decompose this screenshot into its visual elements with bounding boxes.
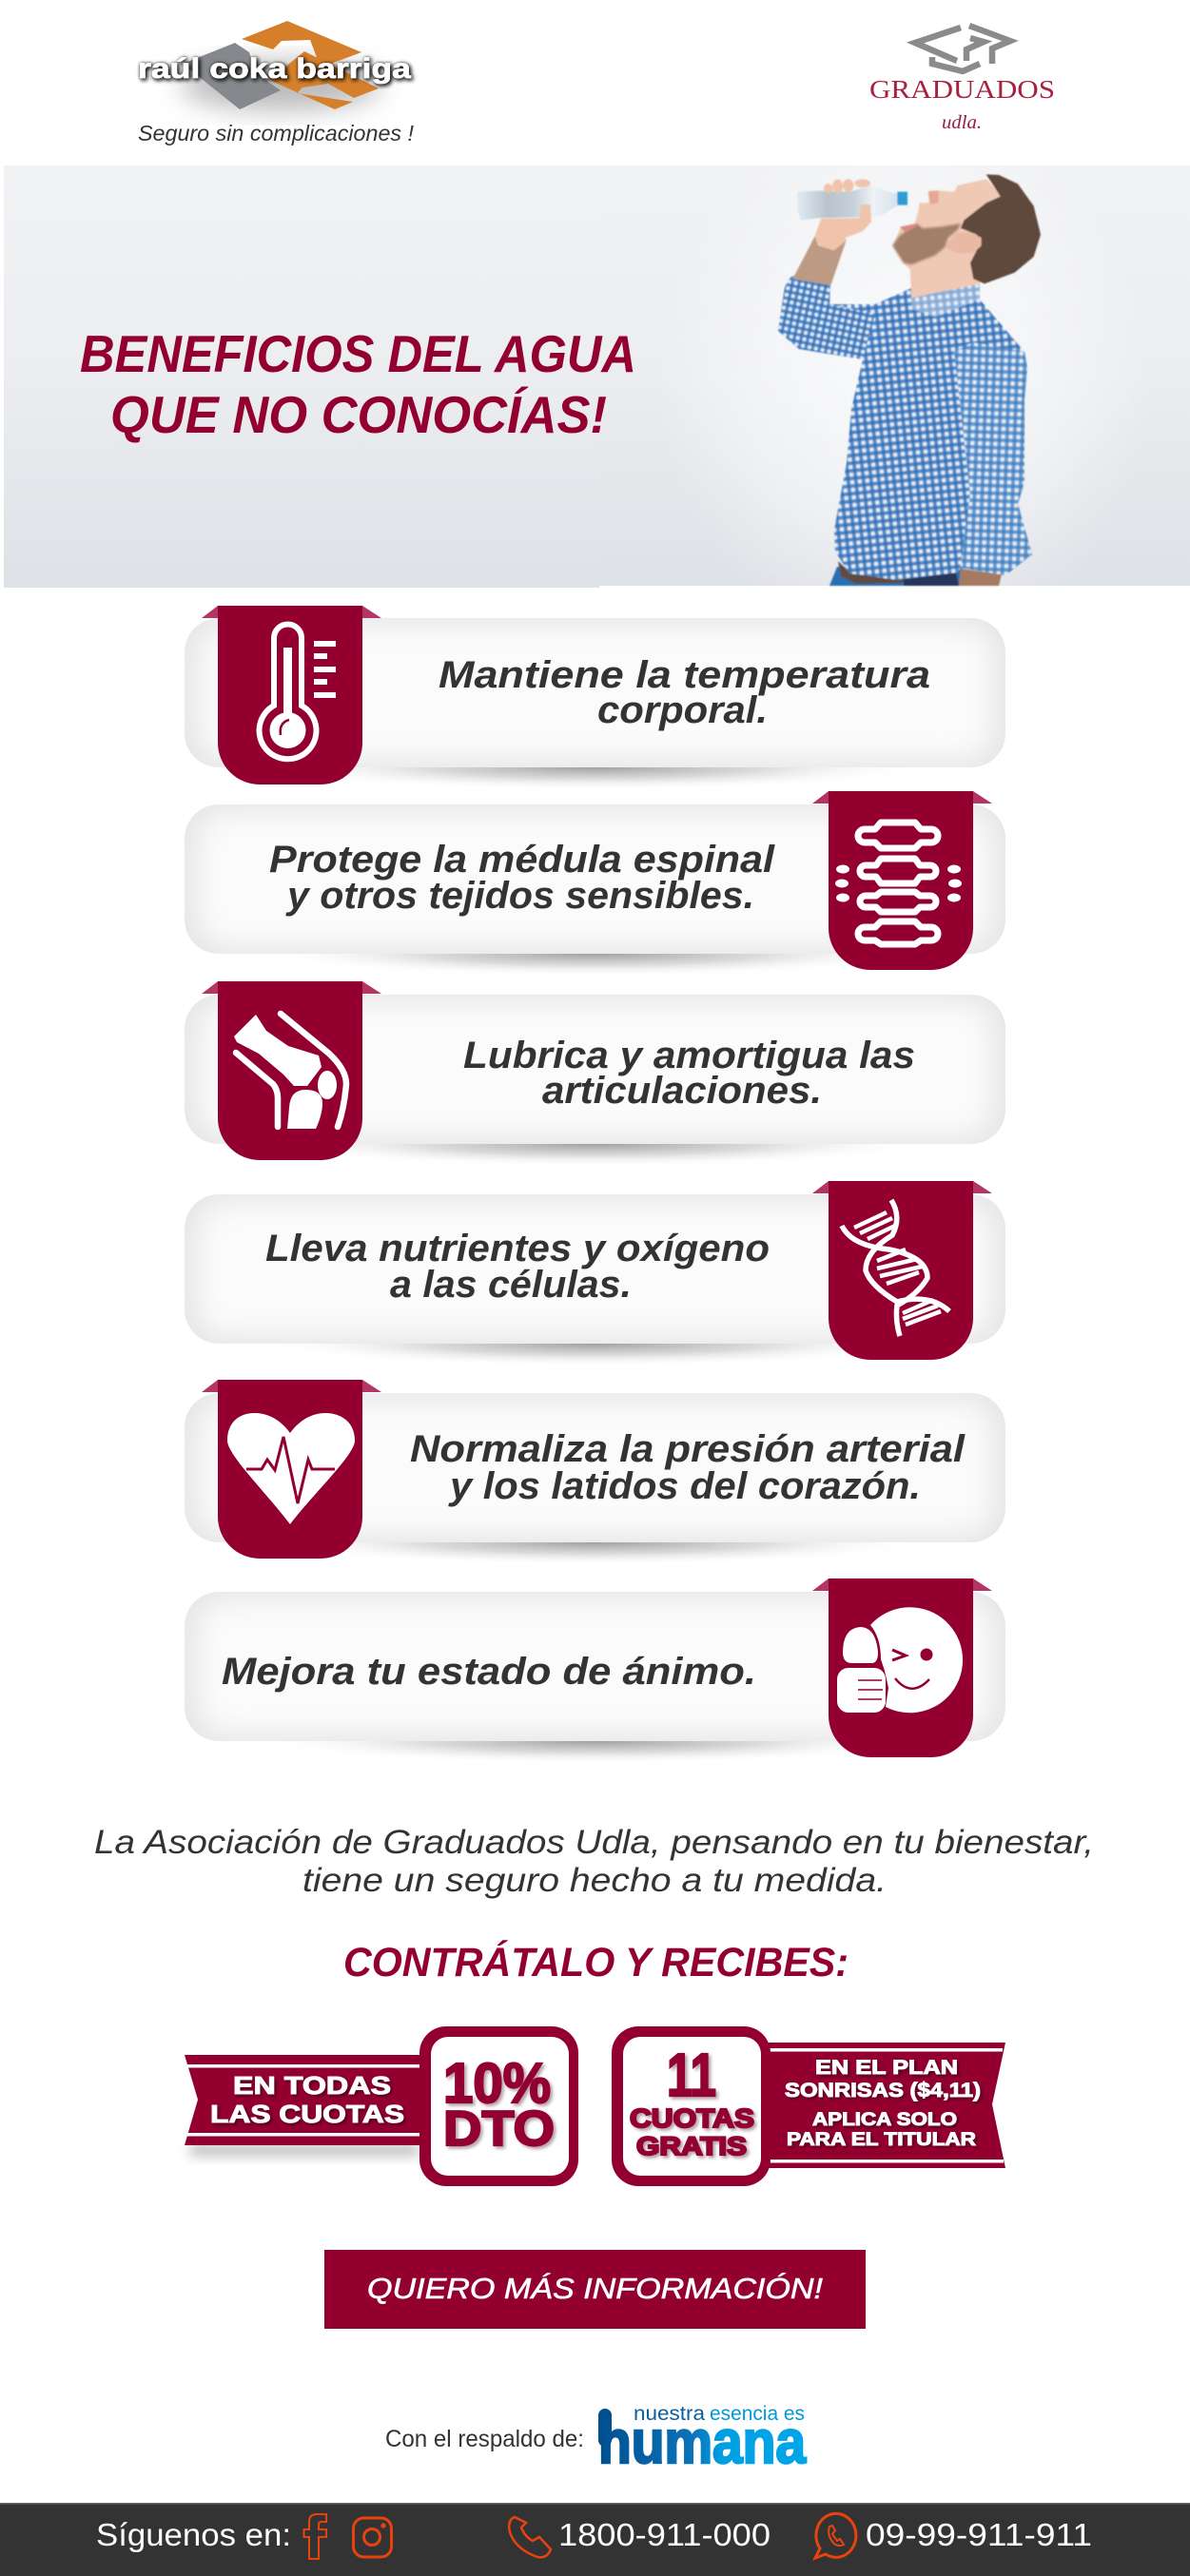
ribbon text: EN EL PLAN: [815, 2057, 958, 2079]
text: udla signature: udla.: [942, 112, 982, 133]
beard: [892, 223, 961, 264]
icon: phone: [509, 2517, 551, 2557]
icon: gray diamond: [183, 43, 281, 109]
hero title: BENEFICIOS DEL AGUA: [80, 324, 636, 383]
paragraph: insurance message: tiene un seguro hecho a tu medida.: [302, 1862, 887, 1899]
hero title: [80, 324, 636, 444]
icon: winking face with thumb up: [837, 1607, 963, 1713]
jeans and belt: [829, 561, 1002, 586]
benefit card 4: nutrients: [185, 1181, 1005, 1366]
installments badge: [612, 2026, 771, 2186]
logo: Humana: [598, 2403, 806, 2476]
ribbon text: LAS CUOTAS: [210, 2100, 404, 2128]
offer: 11 free installments: [612, 2026, 1005, 2186]
header: Raúl Coka Barriga logo: [138, 21, 415, 145]
icon: graduation cap: [915, 26, 1010, 71]
tagline: esencia es: [710, 2403, 805, 2425]
head, arm and bottle drawn in photo crop coordinates: [792, 174, 1041, 317]
ribbon: [202, 981, 381, 1160]
shirt: [778, 276, 1032, 580]
ribbon text: EN TODAS: [233, 2071, 391, 2100]
benefit card 1: temperature: [185, 606, 1005, 790]
text: y los latidos del corazón.: [448, 1465, 921, 1507]
icon: spine: [858, 823, 938, 944]
text: [265, 1228, 770, 1306]
text: Protege la médula espinal: [269, 839, 775, 881]
benefit card 3: joints: [185, 981, 1005, 1167]
text: [410, 1428, 966, 1507]
collar: [911, 283, 980, 317]
card background: [185, 1592, 1005, 1764]
icon: thermometer: [259, 624, 336, 759]
installments badge: GRATIS: [636, 2132, 747, 2160]
shirt raised arm: [778, 276, 875, 359]
icon: orange diamond: [242, 21, 379, 109]
heading: contrátalo y recibes: CONTRÁTALO Y RECIBES:: [343, 1940, 849, 1985]
ear: [945, 232, 982, 254]
text: company name: raúl coka barriga: [138, 53, 411, 85]
neck and face: [892, 179, 1004, 298]
hair: [961, 174, 1041, 283]
header: Graduados UDLA logo: [869, 26, 1055, 133]
card background: [185, 804, 1005, 977]
icon: knee: [234, 1014, 346, 1129]
text: [463, 1035, 915, 1112]
right ribbon: [767, 2043, 1005, 2168]
discount badge: [419, 2026, 578, 2186]
text: Lubrica y amortigua las: [463, 1035, 915, 1076]
wordmark: humana: [598, 2408, 806, 2476]
left ribbon: [185, 2055, 423, 2145]
ribbon: [202, 1380, 381, 1559]
text: [269, 839, 775, 917]
text: Normaliza la presión arterial: [410, 1428, 966, 1470]
hand: [815, 179, 871, 250]
benefit card 6: mood: [185, 1579, 1005, 1764]
paragraph: insurance message: La Asociación de Graduados Udla, pensando en tu bienestar,: [94, 1824, 1094, 1861]
installments badge: 11: [667, 2041, 716, 2109]
footer bar: [0, 2503, 1190, 2576]
ribbon shadow: [190, 2143, 419, 2157]
text: y otros tejidos sensibles.: [285, 875, 754, 917]
card background: [185, 1393, 1005, 1565]
shirt sleeve: [954, 342, 1032, 575]
forearm: [792, 236, 847, 285]
hero banner: [4, 105, 1190, 656]
text: articulaciones.: [542, 1070, 822, 1112]
backing line: Con el respaldo de:: [385, 2426, 584, 2452]
text: Mejora tu estado de ánimo.: [222, 1651, 756, 1693]
discount badge: 10%: [443, 2052, 551, 2115]
text: Mantiene la temperatura: [439, 654, 930, 696]
icon: facebook: [304, 2514, 326, 2559]
icon: heart with pulse: [227, 1413, 355, 1524]
card background: [185, 995, 1005, 1167]
photo: man drinking water: [778, 174, 1041, 586]
tagline: nuestra: [634, 2403, 705, 2425]
ribbon: [812, 1181, 992, 1360]
card background: [185, 1194, 1005, 1366]
tagline: [634, 2403, 805, 2425]
ribbon: [812, 1579, 992, 1757]
button: more information: [324, 2250, 866, 2329]
hero title: QUE NO CONOCÍAS!: [110, 385, 607, 444]
ribbon text: SONRISAS ($4,11): [785, 2080, 981, 2101]
text: whatsapp number: 09-99-911-911: [866, 2517, 1092, 2552]
ribbon text: PARA EL TITULAR: [787, 2130, 976, 2150]
installments badge: CUOTAS: [630, 2103, 754, 2133]
button: more information: QUIERO MÁS INFORMACIÓN!: [367, 2272, 823, 2305]
lips and nose shading: [900, 191, 939, 232]
paragraph: insurance message: [94, 1824, 1094, 1899]
icon: whatsapp: [815, 2513, 856, 2558]
ribbon text: APLICA SOLO: [812, 2110, 957, 2130]
benefit card 5: blood pressure: [185, 1380, 1005, 1565]
icon: spine side marks: [835, 865, 962, 901]
text: GRADUADOS: GRADUADOS: [869, 75, 1055, 104]
text: a las células.: [390, 1264, 632, 1306]
icon: DNA: [842, 1200, 949, 1336]
benefit card 2: spinal cord: [185, 791, 1005, 977]
text: tagline: Seguro sin complicaciones !: [138, 121, 415, 145]
icon: instagram: [354, 2518, 392, 2557]
ribbon text: [785, 2057, 981, 2150]
ribbon: [202, 606, 381, 784]
ribbon text: [210, 2071, 404, 2128]
text: corporal.: [597, 689, 768, 731]
text: [439, 654, 930, 731]
offer: 10% discount: [185, 2026, 578, 2186]
text: phone number: 1800-911-000: [558, 2517, 771, 2552]
ribbon: [812, 791, 992, 970]
bottle: [797, 185, 907, 221]
text: Lleva nutrientes y oxígeno: [265, 1228, 770, 1269]
card background: [185, 618, 1005, 790]
discount badge: DTO: [443, 2101, 555, 2157]
text: síguenos en: Síguenos en:: [96, 2517, 291, 2552]
